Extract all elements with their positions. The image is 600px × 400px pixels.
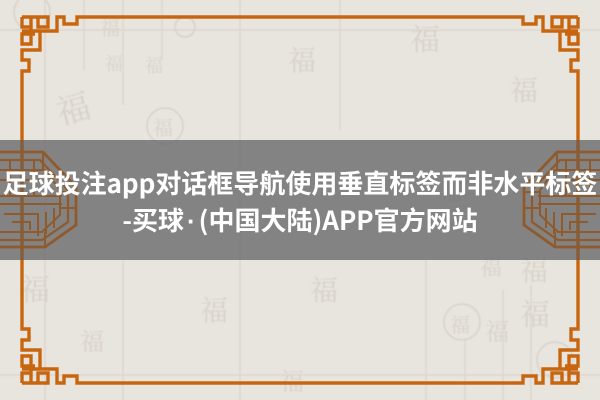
background: paper with fu-character watermarks: 福 [100,12,120,41]
frame: bottom-right corner knot [300,200,578,383]
background: paper with fu-character watermarks: 福 [310,269,338,309]
title text [3,164,597,238]
background: paper with fu-character watermarks: 福 [20,265,50,309]
background: paper with fu-character watermarks: 福 [50,79,95,135]
background: paper with fu-character watermarks: 福 [280,362,304,397]
background: paper with fu-character watermarks: 福 [510,69,538,109]
background: paper with fu-character watermarks: 福 [200,289,228,329]
background: paper with fu-character watermarks: 福 [145,52,163,78]
background: paper with fu-character watermarks: 福 [520,290,550,334]
grey title band [0,140,600,260]
background: paper with fu-character watermarks: 福 [153,112,173,141]
background: paper with fu-character watermarks: 福 [480,251,502,282]
background: paper with fu-character watermarks: 福 [410,15,440,59]
medallion: left octagon lattice [0,140,76,260]
background: paper with fu-character watermarks: 福 [450,309,470,338]
medallion: right octagon lattice [524,140,600,260]
background: paper with fu-character watermarks: 福 [288,39,316,79]
frame: top-right corner knot [300,17,578,200]
background: paper with fu-character watermarks: 福 [440,176,462,207]
background: paper with fu-character watermarks: 福 [520,249,548,289]
background: paper with fu-character watermarks: 福 [105,50,123,76]
background: paper with fu-character watermarks: 福 [80,322,104,357]
title text: 足球投注app对话框导航使用垂直标签而非水平标签 [3,164,597,201]
frame: bottom-left corner knot [22,200,300,383]
background: paper with fu-character watermarks: 福 [485,312,509,347]
title text: -买球·(中国大陆)APP官方网站 [122,201,478,238]
frame: top-left corner knot [22,17,300,200]
